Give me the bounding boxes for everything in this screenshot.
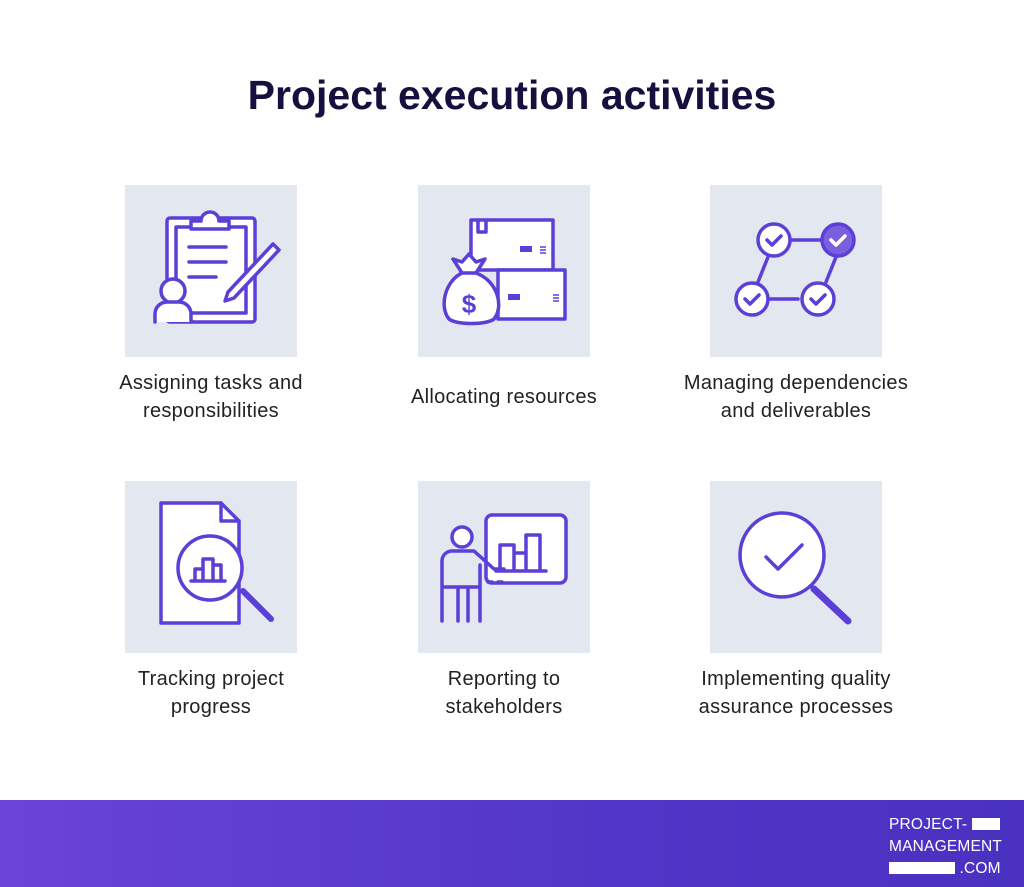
label 3: Managing dependencies	[684, 372, 908, 394]
label 2: Allocating resources	[411, 386, 597, 408]
footer band	[0, 800, 1024, 887]
label 6	[699, 668, 893, 718]
panel: tracking	[125, 481, 297, 653]
label 4: Tracking project	[138, 668, 284, 690]
panel: dependencies	[710, 185, 882, 357]
label 5: Reporting to	[448, 668, 560, 690]
title: Project execution activities	[248, 72, 776, 118]
panel: quality	[710, 481, 882, 653]
label 4	[138, 668, 284, 718]
panel: reporting	[418, 481, 590, 653]
panel: allocating resources: $	[462, 289, 477, 319]
label 4: progress	[171, 696, 251, 718]
label 6: assurance processes	[699, 696, 893, 718]
label 3	[684, 372, 908, 422]
logo: PROJECT-	[889, 816, 967, 833]
label 5: stakeholders	[446, 696, 562, 718]
label 1	[119, 372, 303, 422]
label 1: responsibilities	[143, 400, 279, 422]
logo: .COM	[960, 860, 1001, 877]
label 3: and deliverables	[721, 400, 871, 422]
label 6: Implementing quality	[701, 668, 891, 690]
panel: allocating resources	[418, 185, 590, 357]
panel: assigning tasks	[125, 185, 297, 357]
logo	[889, 816, 1002, 877]
label 5	[446, 668, 562, 718]
label 1: Assigning tasks and	[119, 372, 303, 394]
logo: MANAGEMENT	[889, 838, 1002, 855]
